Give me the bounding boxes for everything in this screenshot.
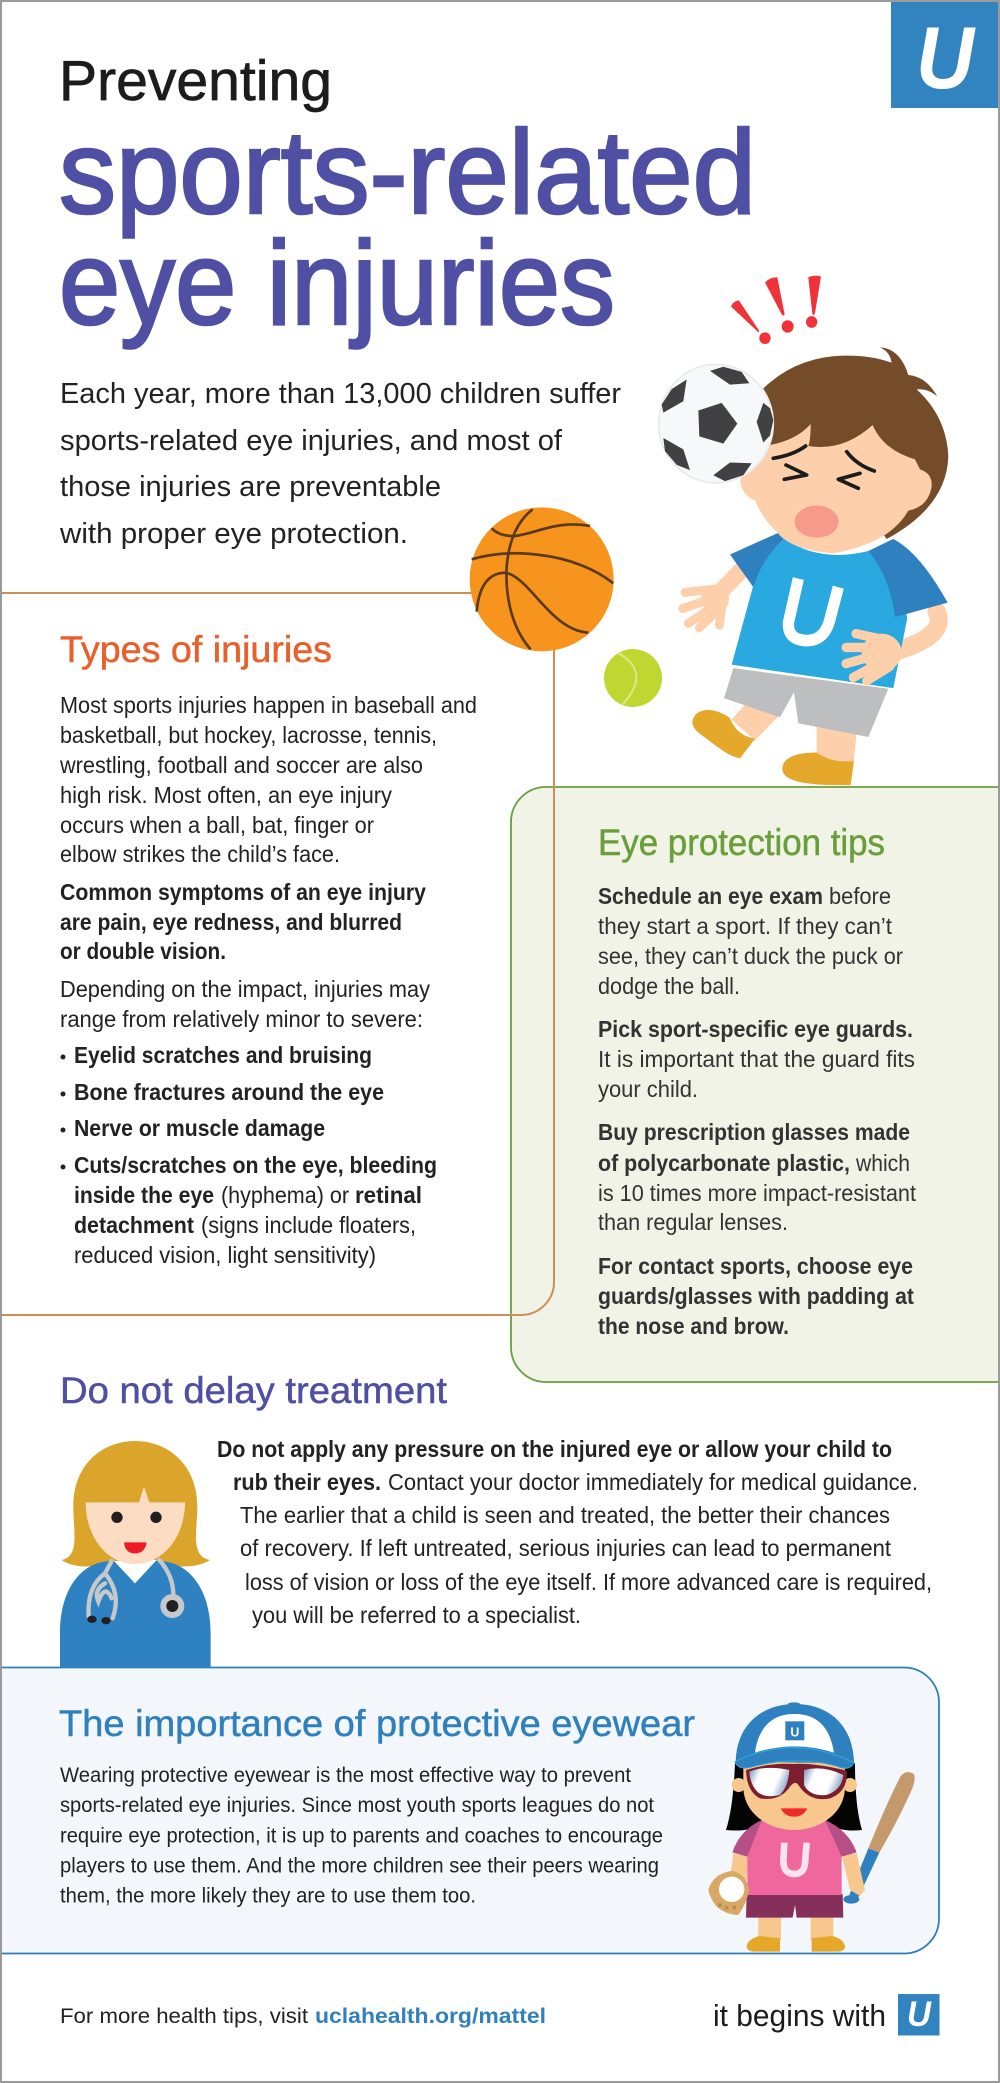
footer: health tips link: uclahealth.org/mattel [315, 2005, 546, 2028]
boy: eyes and brows [773, 446, 874, 488]
text block: protective eyewear body: players to use them. And the more children see their peers wearing [60, 1854, 659, 1878]
tip: contact sports: the nose and brow. [598, 1313, 789, 1339]
title: eye injuries [59, 217, 615, 350]
intro text: sports-related eye injuries, and most of [60, 425, 563, 457]
text block: do not delay treatment: you will be referred to a specialist. [252, 1602, 581, 1628]
intro text: with proper eye protection. [59, 518, 408, 550]
panel: eye protection tips background [511, 787, 1000, 1382]
text block: common symptoms [60, 879, 426, 964]
doctor: hair [62, 1441, 210, 1566]
text block: range of injuries: range from relatively minor to severe: [60, 1006, 423, 1032]
icon: basketball [470, 507, 614, 651]
tip: polycarbonate glasses: Buy prescription glasses made [598, 1119, 910, 1145]
footer: it begins with U logo: it begins with [713, 1998, 886, 2033]
tip: eye exam: before [829, 883, 891, 909]
list: injury types: detachment [74, 1212, 194, 1238]
heading: eye protection tips: Eye protection tips [598, 822, 885, 863]
heading: do not delay treatment: Do not delay treatment [60, 1370, 448, 1411]
tip: eye guards: Pick sport-specific eye guards. [598, 1016, 913, 1042]
intro text: those injuries are preventable [60, 471, 441, 503]
text block: do not delay treatment: Do not apply any pressure on the injured eye or allow your child to [217, 1436, 892, 1462]
tip: eye exam: Schedule an eye exam [598, 883, 823, 909]
icon: stethoscope [87, 1560, 184, 1624]
text block: types of injuries intro: wrestling, football and soccer are also [59, 752, 423, 778]
tip: eye guards [598, 1016, 915, 1102]
boy: hair [763, 347, 948, 539]
doctor: collar [114, 1560, 157, 1583]
boy: back arm and hand [683, 563, 939, 651]
heading: types of injuries: Types of injuries [60, 629, 332, 670]
text block: types of injuries intro: occurs when a ball, bat, finger or [60, 812, 374, 838]
girl: shorts [746, 1894, 843, 1918]
icon: soccer ball [659, 364, 773, 483]
text block: range of injuries: Depending on the impact, injuries may [60, 976, 430, 1002]
text block: do not delay treatment: rub their eyes. [233, 1469, 381, 1495]
girl: legs [758, 1917, 833, 1941]
text block: types of injuries intro [59, 692, 477, 867]
tip: eye exam [598, 883, 903, 999]
list: injury types [60, 1042, 437, 1268]
logo: top-right U badge: U [916, 8, 976, 107]
intro text [59, 378, 621, 550]
tip: eye exam: see, they can’t duck the puck or [598, 943, 903, 969]
text block: protective eyewear body: require eye protection, it is up to parents and coaches to encourage [60, 1824, 663, 1848]
list: injury types: retinal [355, 1182, 422, 1208]
list: injury types: Bone fractures around the eye [74, 1079, 384, 1105]
girl: face [743, 1762, 845, 1830]
boy: front hand on stomach [846, 634, 902, 681]
text block: protective eyewear body: Wearing protective eyewear is the most effective way to prevent [60, 1764, 631, 1787]
tip: polycarbonate glasses: which [855, 1150, 910, 1176]
footer: it begins with U logo: U [907, 1995, 932, 2034]
list: injury types: Eyelid scratches and bruising [74, 1042, 372, 1068]
text block: do not delay treatment [217, 1436, 932, 1628]
title: Preventing [59, 49, 332, 113]
girl: shirt [732, 1820, 857, 1895]
list: injury types: inside the eye [74, 1182, 214, 1208]
doctor: face [86, 1487, 185, 1564]
text block: protective eyewear body: them, the more likely they are to use them too. [60, 1884, 476, 1908]
text block: common symptoms: Common symptoms of an eye injury [60, 879, 426, 905]
icon: bat [843, 1772, 915, 1904]
tip: eye guards: your child. [598, 1076, 698, 1102]
doctor: mouth [124, 1542, 147, 1553]
illustration: boy hit by soccer ball [659, 276, 948, 785]
tip: polycarbonate glasses [598, 1119, 917, 1235]
tip: polycarbonate glasses: of polycarbonate plastic, [598, 1150, 850, 1176]
heading: importance of protective eyewear: The importance of protective eyewear [59, 1703, 695, 1744]
text block: do not delay treatment: The earlier that a child is seen and treated, the better their chances [240, 1502, 890, 1528]
boy: legs and shoes [692, 703, 857, 785]
text block: protective eyewear body [60, 1764, 663, 1908]
text block: common symptoms: are pain, eye redness, and blurred [60, 909, 402, 935]
girl: cap [735, 1702, 854, 1768]
connector line: types of injuries frame [0, 593, 554, 1315]
list: injury types: (signs include floaters, [201, 1212, 416, 1238]
text block: protective eyewear body: sports-related eye injuries. Since most youth sports leagues do not [60, 1794, 654, 1817]
tip: polycarbonate glasses: than regular lenses. [598, 1209, 788, 1235]
doctor: eyes [111, 1512, 162, 1523]
title [59, 49, 756, 350]
girl: arms [730, 1853, 865, 1896]
intro text: Each year, more than 13,000 children suffer [60, 378, 621, 410]
tip: contact sports: guards/glasses with padding at [598, 1283, 914, 1309]
girl: mouth [781, 1808, 807, 1817]
text block: common symptoms: or double vision. [60, 938, 226, 964]
footer: it begins with U logo [713, 1994, 940, 2036]
icon: tennis ball [604, 649, 662, 707]
doctor: body [60, 1561, 211, 1667]
text block: types of injuries intro: elbow strikes the child’s face. [60, 841, 340, 867]
boy: head [740, 347, 948, 553]
tip: eye guards: It is important that the guard fits [598, 1046, 915, 1072]
panel: importance of protective eyewear [0, 1668, 939, 1954]
tip: polycarbonate glasses: is 10 times more impact-resistant [598, 1180, 917, 1206]
text block: types of injuries intro: Most sports injuries happen in baseball and [60, 692, 477, 718]
girl: cap: U [790, 1724, 799, 1739]
footer: health tips link [60, 2005, 546, 2028]
girl: hair back [726, 1763, 862, 1831]
boy: shorts [724, 668, 888, 737]
list: injury types: (hyphema) or [221, 1182, 349, 1208]
panel: eye protection tips text [598, 822, 917, 1339]
footer: health tips link: For more health tips, visit [60, 2005, 308, 2028]
tip: contact sports [598, 1253, 914, 1339]
text block: do not delay treatment: loss of vision or loss of the eye itself. If more advanced care is required, [245, 1569, 932, 1595]
girl: sunglasses [746, 1764, 847, 1799]
title: sports-related [59, 106, 756, 239]
tip: eye exam: dodge the ball. [598, 973, 740, 999]
illustration: girl with bat and glove [708, 1702, 915, 1952]
text block: do not delay treatment: Contact your doctor immediately for medical guidance. [388, 1469, 918, 1495]
illustration: doctor [60, 1441, 211, 1667]
tip: eye exam: they start a sport. If they can’t [598, 913, 893, 939]
text block: do not delay treatment: of recovery. If left untreated, serious injuries can lead to permanent [240, 1535, 892, 1561]
girl: shoes [747, 1936, 845, 1952]
text block: types of injuries intro: basketball, but hockey, lacrosse, tennis, [60, 722, 437, 748]
list: injury types: reduced vision, light sensitivity) [74, 1242, 376, 1268]
boy: shirt [730, 532, 948, 688]
list: injury types: Cuts/scratches on the eye, bleeding [74, 1152, 437, 1178]
boy: body [683, 532, 948, 785]
girl: ears [732, 1778, 857, 1792]
logo: top-right U badge [891, 2, 1000, 108]
list: injury types: Nerve or muscle damage [74, 1115, 325, 1141]
tip: contact sports: For contact sports, choose eye [598, 1253, 913, 1279]
icon: glove and baseball [708, 1871, 749, 1915]
text block: range of injuries [60, 976, 430, 1032]
icon: exclamation marks [731, 276, 821, 344]
boy: mouth [795, 506, 839, 538]
text block: types of injuries intro: high risk. Most often, an eye injury [60, 782, 392, 808]
boy: face [740, 424, 932, 553]
